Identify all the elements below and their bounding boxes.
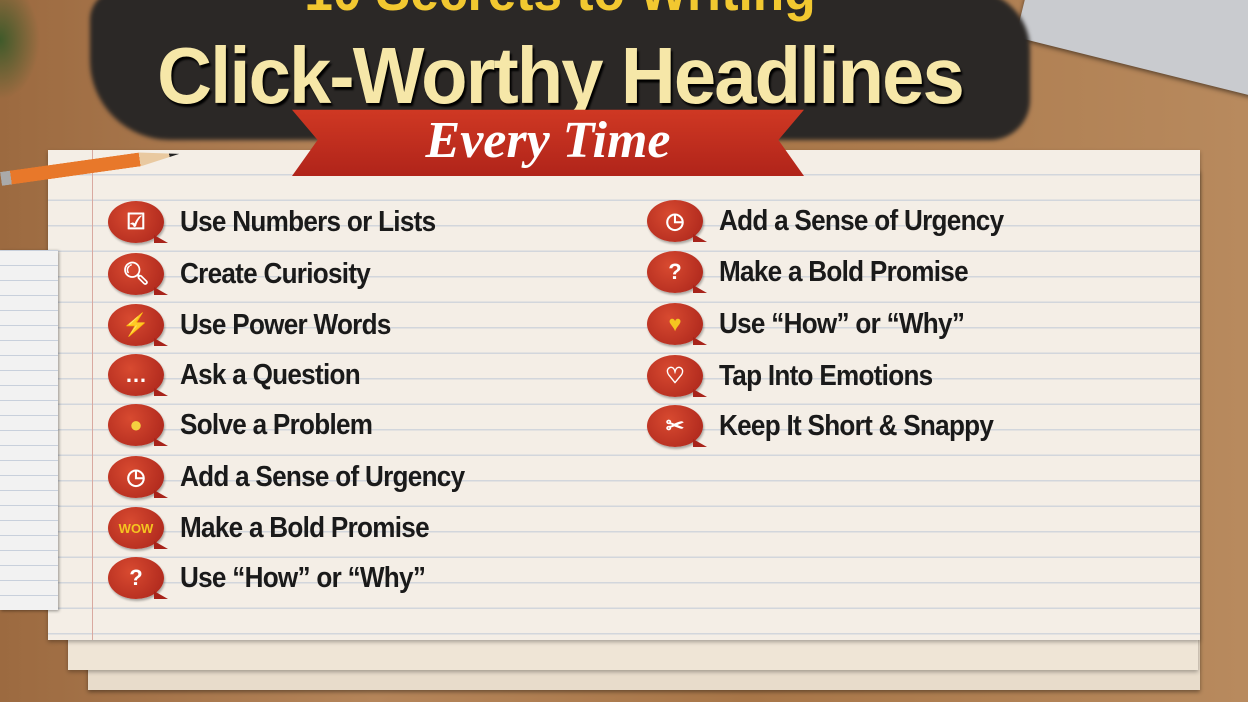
item 7: WOW	[119, 520, 153, 536]
ribbon: Every Time	[426, 112, 670, 168]
title: Click-Worthy Headlines	[157, 31, 963, 120]
item 9	[646, 200, 1004, 246]
item 1	[108, 201, 436, 246]
item 7: Make a Bold Promise	[180, 512, 429, 544]
ribbon	[292, 104, 804, 176]
item 9: Add a Sense of Urgency	[719, 204, 1003, 236]
item 1: ☑	[126, 209, 146, 234]
item 5: Solve a Problem	[180, 408, 372, 440]
title	[87, 0, 1033, 144]
item 11	[646, 303, 964, 348]
item 6: ◷	[126, 464, 146, 489]
item 10: ?	[668, 259, 682, 284]
notepad left	[0, 250, 58, 610]
item 2: Create Curiosity	[180, 258, 370, 290]
item 11: Use “How” or “Why”	[719, 308, 964, 340]
item 13: ✂	[666, 413, 684, 438]
left list	[108, 201, 465, 602]
keyboard	[1016, 0, 1248, 100]
item 8: Use “How” or “Why”	[180, 562, 425, 594]
item 6	[108, 456, 465, 502]
item 7	[108, 507, 429, 552]
right list	[646, 200, 1004, 450]
item 1: Use Numbers or Lists	[180, 206, 435, 238]
item 13	[646, 405, 994, 450]
item 3: ⚡	[122, 312, 150, 337]
item 11: ♥	[668, 311, 682, 336]
item 6: Add a Sense of Urgency	[180, 460, 464, 492]
item 8	[108, 557, 425, 602]
item 3	[108, 304, 391, 350]
item 12: ♡	[665, 363, 685, 388]
item 9: ◷	[665, 208, 685, 233]
item 5: ●	[129, 412, 143, 437]
item 8: ?	[129, 565, 143, 590]
item 10: Make a Bold Promise	[719, 256, 968, 288]
plant	[0, 0, 40, 100]
item 12	[646, 355, 932, 400]
item 3: Use Power Words	[180, 308, 391, 340]
item 5	[108, 404, 372, 450]
item 10	[646, 251, 968, 296]
pencil	[0, 152, 179, 186]
item 2	[108, 253, 371, 298]
paper stack	[46, 150, 1203, 694]
item 4: Ask a Question	[180, 358, 360, 390]
item 2: 🔍︎	[122, 261, 150, 286]
item 4: …	[125, 362, 147, 387]
item 13: Keep It Short & Snappy	[719, 410, 993, 442]
item 12: Tap Into Emotions	[719, 360, 932, 392]
item 4	[108, 354, 360, 400]
